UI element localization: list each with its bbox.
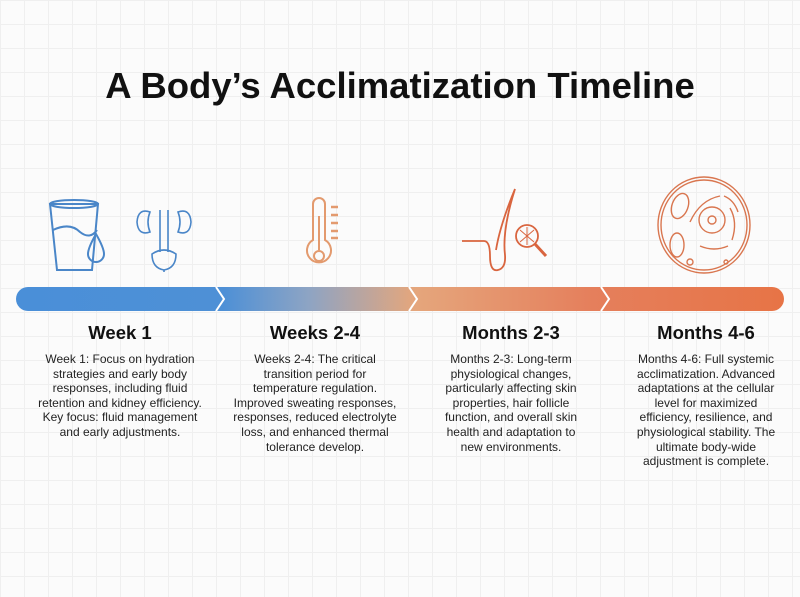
column: weeks 2-4: responses, reduced electrolyte bbox=[233, 410, 397, 424]
column: weeks 2-4 bbox=[233, 322, 397, 454]
column: months 2-3: physiological changes, bbox=[451, 367, 571, 381]
title: A Body’s Acclimatization Timeline bbox=[105, 65, 695, 106]
column: weeks 2-4: loss, and enhanced thermal bbox=[241, 425, 389, 439]
column: week 1: strategies and early body bbox=[53, 367, 187, 381]
icon: water glass with drop bbox=[50, 200, 104, 270]
icon: kidneys bbox=[137, 210, 191, 272]
timeline bar bbox=[16, 287, 784, 311]
icon: thermometer bbox=[307, 198, 338, 262]
column: weeks 2-4: transition period for bbox=[264, 367, 366, 381]
column: week 1: responses, including fluid bbox=[53, 381, 187, 395]
column: months 2-3: properties, hair follicle bbox=[453, 396, 569, 410]
column: months 4-6: ultimate body-wide bbox=[656, 440, 756, 454]
column: months 4-6: efficiency, resilience, and bbox=[640, 410, 772, 424]
column: week 1: and early adjustments. bbox=[60, 425, 180, 439]
column: months 2-3: particularly affecting skin bbox=[445, 381, 577, 395]
column: months 2-3: health and adaptation to bbox=[447, 425, 575, 439]
column: months 4-6: physiological stability. The bbox=[637, 425, 775, 439]
icon: cell bbox=[658, 177, 750, 273]
column: weeks 2-4: tolerance develop. bbox=[266, 440, 364, 454]
column: week 1 bbox=[38, 322, 202, 439]
column: months 2-3: Months 2-3: Long-term bbox=[450, 352, 572, 366]
column: months 4-6 bbox=[637, 322, 775, 468]
column: weeks 2-4: Improved sweating responses, bbox=[234, 396, 396, 410]
column: months 2-3 bbox=[445, 322, 577, 454]
column: weeks 2-4: temperature regulation. bbox=[253, 381, 377, 395]
column: week 1: retention and kidney efficiency. bbox=[38, 396, 202, 410]
column: months 2-3: new environments. bbox=[461, 440, 561, 454]
column: months 4-6: adjustment is complete. bbox=[643, 454, 769, 468]
column: months 4-6: Months 4-6: Full systemic bbox=[638, 352, 774, 366]
column: months 2-3: function, and overall skin bbox=[445, 410, 577, 424]
column: week 1: Week 1: Focus on hydration bbox=[45, 352, 195, 366]
column: weeks 2-4: Weeks 2-4 bbox=[270, 322, 360, 343]
column: months 2-3: Months 2-3 bbox=[462, 322, 560, 343]
column: months 4-6: adaptations at the cellular bbox=[638, 381, 774, 395]
column: months 4-6: Months 4-6 bbox=[657, 322, 755, 343]
column: week 1: Week 1 bbox=[88, 322, 152, 343]
column: week 1: Key focus: fluid management bbox=[43, 410, 197, 424]
column: months 4-6: acclimatization. Advanced bbox=[637, 367, 775, 381]
icon: hair follicle with magnifier bbox=[462, 189, 546, 270]
column: weeks 2-4: Weeks 2-4: The critical bbox=[254, 352, 376, 366]
column: months 4-6: level for maximized bbox=[655, 396, 757, 410]
